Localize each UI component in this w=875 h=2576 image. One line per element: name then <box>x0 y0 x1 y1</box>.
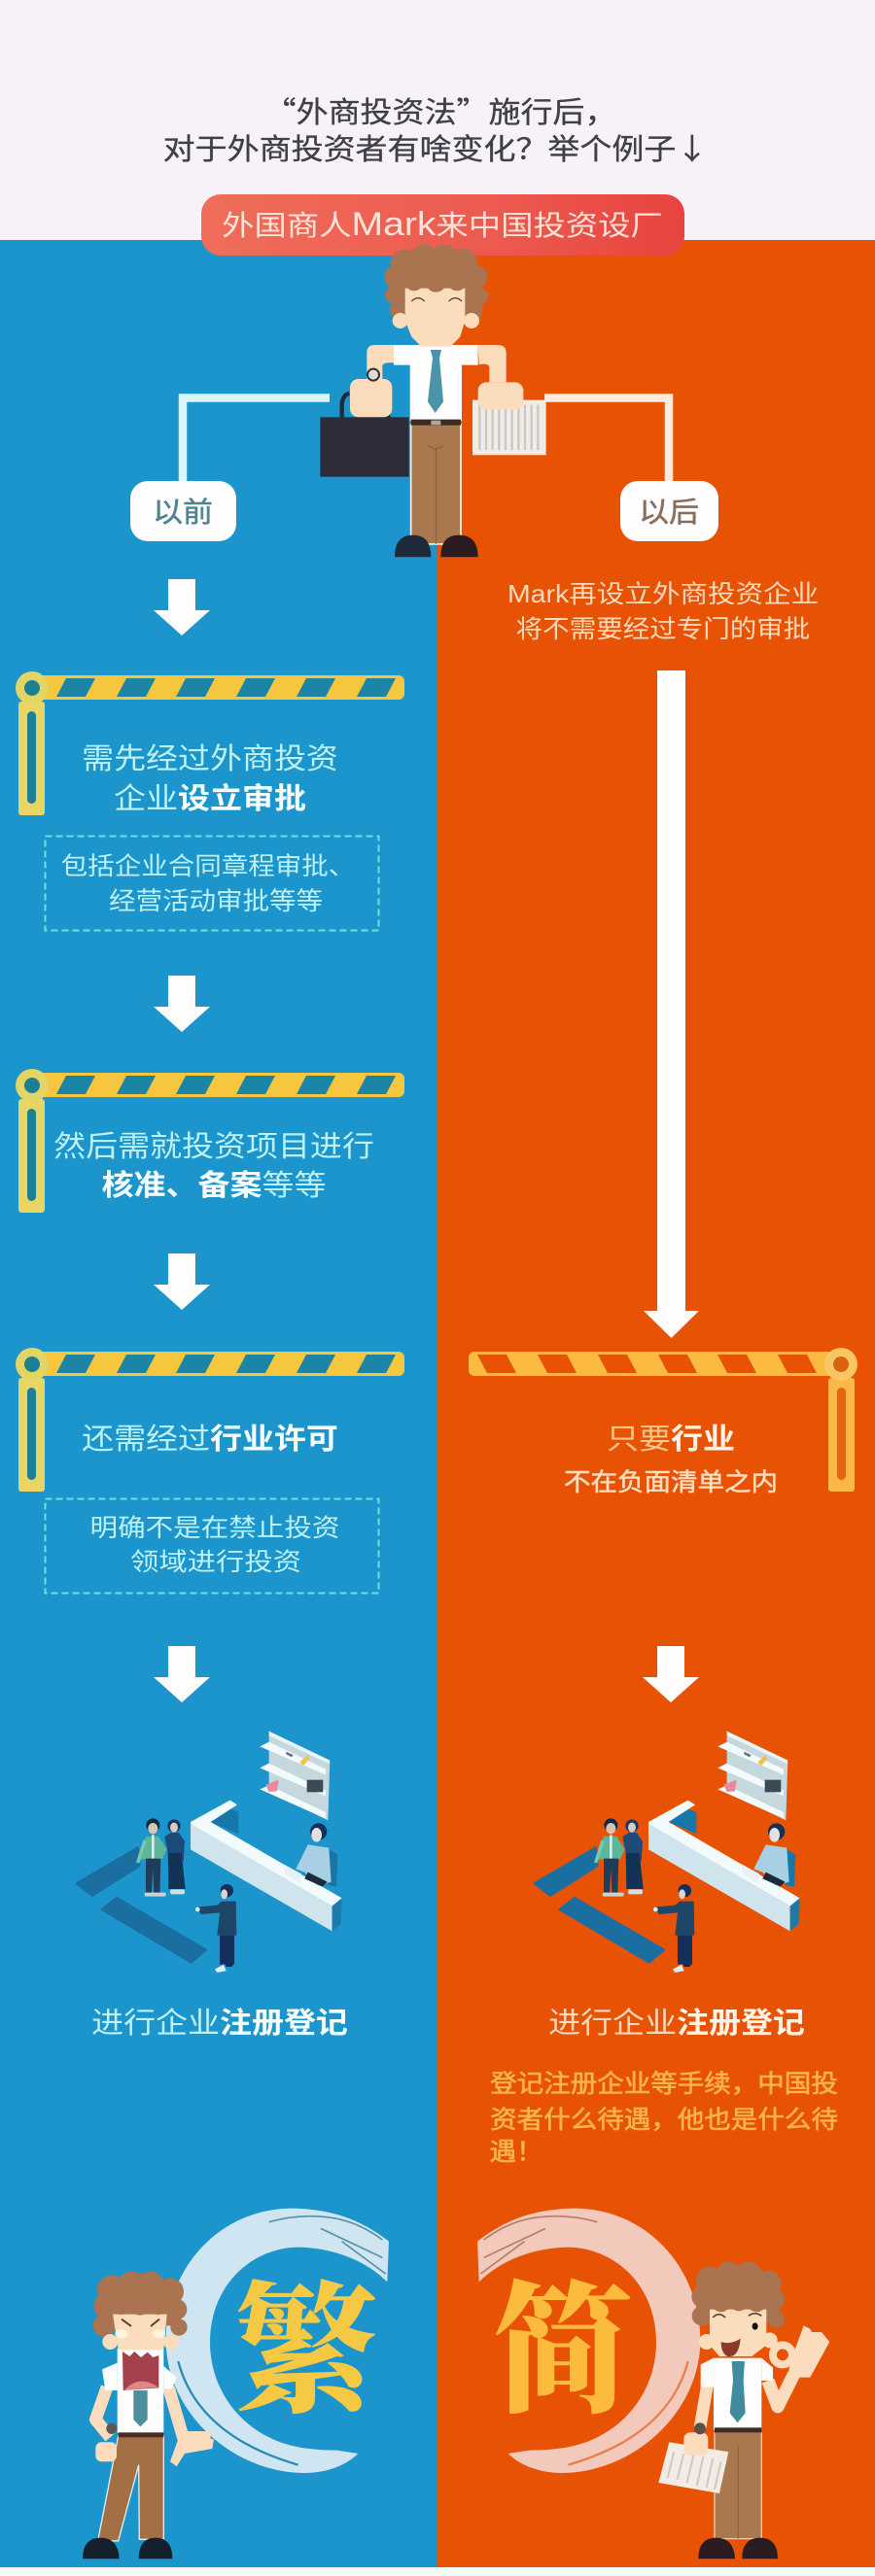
text: after intro: 将不需要经过专门的审批 <box>516 615 810 643</box>
panel: after (orange) <box>437 240 875 2567</box>
text: step 2: 核准、备案等等 <box>102 1168 326 1202</box>
text: after intro <box>508 579 819 643</box>
brush ring: complex <box>166 2209 389 2473</box>
title: 对于外商投资者有啥变化？举个例子↓ <box>163 126 708 169</box>
brush ring: simple <box>477 2209 700 2473</box>
badge: before <box>130 481 236 541</box>
character: angry Mark <box>83 2272 214 2559</box>
text: right gate condition <box>564 1422 778 1496</box>
connector: right branch <box>544 398 669 481</box>
dashed box: step 3 note <box>45 1498 379 1594</box>
text: right note <box>489 2063 838 2168</box>
text: right gate condition: 只要行业 <box>607 1422 735 1456</box>
connector: left branch <box>183 398 330 481</box>
gate: left 1 <box>16 671 404 815</box>
text: step 1: 需先经过外商投资 <box>82 741 338 775</box>
big character: simple: 简 <box>492 2237 634 2441</box>
badge: after: 以后 <box>639 489 699 531</box>
gate: right <box>469 1348 858 1492</box>
panel: before (blue) <box>0 240 437 2567</box>
big character: complex: 繁 <box>235 2237 377 2441</box>
text: step 1: 企业设立审批 <box>114 781 306 815</box>
arrow: right 4 <box>643 1646 699 1702</box>
subtitle pill: 外国商人Mark来中国投资设厂 <box>222 205 663 242</box>
text: step 2: 然后需就投资项目进行 <box>53 1129 374 1163</box>
arrow: left 4 <box>154 1646 210 1702</box>
badge: after <box>620 481 718 541</box>
dashed box: step 3 note: 领域进行投资 <box>130 1548 301 1576</box>
badge: before: 以前 <box>153 489 213 531</box>
text: registration right: 进行企业注册登记 <box>548 2006 805 2040</box>
text: registration left: 进行企业注册登记 <box>91 2006 348 2040</box>
text: step 2 <box>53 1129 374 1202</box>
dashed box: step 1 note: 包括企业合同章程审批、 <box>61 852 355 880</box>
illustration: registration hall right <box>535 1732 800 1973</box>
dashed box: step 1 note: 经营活动审批等等 <box>109 887 323 915</box>
title: “外商投资法”施行后， <box>264 89 616 132</box>
page background top <box>0 0 875 240</box>
text: right note: 资者什么待遇，他也是什么待 <box>490 2099 838 2136</box>
text: after intro: Mark再设立外商投资企业 <box>508 579 819 608</box>
gate: left 3 <box>16 1348 404 1492</box>
dashed box: step 1 note <box>45 836 379 931</box>
arrow: left 1 <box>154 579 210 635</box>
arrow: left 3 <box>154 1254 210 1310</box>
arrow: left 2 <box>154 976 210 1032</box>
bottom strip <box>0 2567 875 2576</box>
subtitle pill <box>201 194 684 256</box>
character: Mark with briefcase and papers <box>320 245 546 557</box>
text: right gate condition: 不在负面清单之内 <box>564 1468 778 1496</box>
dashed box: step 3 note: 明确不是在禁止投资 <box>90 1513 339 1542</box>
text: right note: 遇！ <box>489 2131 543 2168</box>
text: step 1 <box>82 741 338 815</box>
text: step 3: 还需经过行业许可 <box>82 1422 338 1456</box>
illustration: registration hall left <box>77 1732 342 1973</box>
gate: left 2 <box>16 1069 404 1213</box>
character: happy Mark <box>658 2262 829 2559</box>
title <box>163 89 708 169</box>
text: right note: 登记注册企业等手续，中国投 <box>490 2063 838 2100</box>
arrow: long right <box>644 670 699 1338</box>
